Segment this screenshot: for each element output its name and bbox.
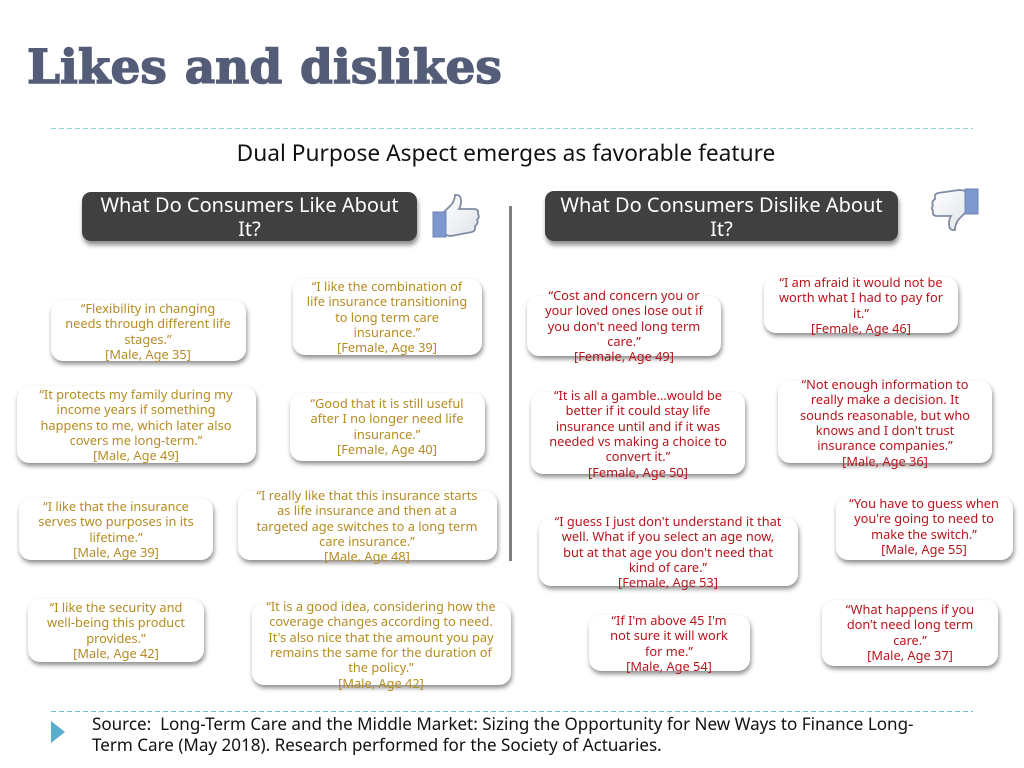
quote: above 45: not sure it will work [610,626,728,644]
quote: understand: [Female, Age 53] [618,573,718,591]
quote: protects: covers me long-term.” [70,431,202,449]
header: dislikes [545,191,898,241]
quote: two purposes: serves two purposes in its [38,512,194,530]
header: likes [82,192,417,241]
quote: gamble: “It is all a gamble…would be [554,386,722,404]
quote card: what happens [822,600,998,666]
quote: what happens [846,600,974,664]
quote: cost: care.” [607,332,641,350]
panel: likes quotes [14,277,516,692]
header: likes: It? [238,215,261,242]
quote: cost [545,286,704,365]
quote: not enough: knows and I don't trust [816,421,954,439]
quote card: good idea [252,603,511,685]
quote: good idea: coverage changes according to need. [269,612,493,630]
quote: not enough [800,375,970,470]
quote: security [47,598,185,662]
subtitle: Dual Purpose Aspect emerges as favorable feature [237,137,775,168]
quote: combination: to long term care [335,308,439,326]
icon: thumbs up [432,194,480,238]
quote: what happens: [Male, Age 37] [867,646,953,664]
quote: two purposes: [Male, Age 39] [73,543,159,561]
quote: security: well-being this product [47,613,185,631]
quote: really like: care insurance.” [319,532,415,550]
quote card: flexibility [51,300,246,361]
quote: not enough: “Not enough information to [802,375,968,393]
quote: above 45: for me.” [645,642,693,660]
quote: good idea: remains the same for the duration of [270,643,492,661]
quote: guess when: “You have to guess when [849,494,999,512]
quote: still useful: after I no longer need life [310,409,464,427]
quote: security: “I like the security and [50,598,182,616]
title: Likes and dislikes [27,40,502,95]
quote card: above 45 [589,615,750,671]
quote: understand: well. What if you select an age now, [562,527,774,545]
quote card: guess when [836,497,1013,560]
quote: good idea: It's also nice that the amount you pay [268,628,494,646]
quote: afraid: “I am afraid it would not be [779,273,943,291]
quote: protects [39,385,233,464]
quote: not enough: insurance companies.” [817,436,953,454]
quote: good idea: the policy.” [348,658,414,676]
quote: protects: [Male, Age 49] [93,446,179,464]
quote: understand: kind of care.” [629,558,707,576]
quote card: still useful [290,393,485,461]
quote card: gamble [531,392,745,474]
quote card: really like [238,491,497,560]
quote: gamble: better if it could stay life [566,401,710,419]
quote: cost: “Cost and concern you or [548,286,700,304]
quote: security: provides.” [86,629,146,647]
quote card: security [28,599,204,662]
quote: not enough: sounds reasonable, but who [800,406,970,424]
divider [509,206,512,561]
quote: combination: life insurance transitioning [307,292,467,310]
quote: cost: [Female, Age 49] [574,347,674,365]
quote: what happens: don’t need long term [847,615,973,633]
quote: two purposes [38,497,194,561]
panel: dislikes quotes [524,273,1018,678]
source note: Term Care (May 2018). Research performed for the Society of Actuaries. [92,733,662,756]
quote: protects: income years if something [57,400,215,418]
quote: afraid [779,273,943,337]
quote: above 45 [610,611,728,675]
quote: good idea: [Male, Age 42] [338,674,424,692]
quote: gamble: convert it.” [606,447,670,465]
quote: guess when: [Male, Age 55] [881,540,967,558]
quote: guess when: make the switch.” [871,525,977,543]
quote card: protects [17,386,256,463]
quote card: cost [527,296,721,356]
quote card: combination [293,279,482,355]
quote: still useful: insurance.” [354,425,420,443]
quote: guess when [849,494,999,558]
quote: what happens: care.” [893,631,927,649]
quote: not enough: [Male, Age 36] [842,452,928,470]
quote: what happens: “What happens if you [846,600,974,618]
quote: flexibility: stages.” [124,330,172,348]
header: dislikes: It? [710,215,733,242]
quote: not enough: really make a decision. It [811,390,959,408]
quote: good idea [266,597,496,692]
quote: above 45: “If I'm above 45 I'm [611,611,727,629]
quote: gamble [549,386,727,481]
quote: flexibility: [Male, Age 35] [105,345,191,363]
quote: still useful: [Female, Age 40] [337,440,437,458]
quote: protects: happens to me, which later also [41,416,231,434]
quote: good idea: “It is a good idea, considering how the [266,597,496,615]
icon: source arrow [51,721,65,743]
quote: afraid: it.” [853,304,869,322]
quote card: not enough [778,381,992,463]
quote: guess when: you're going to need to [854,509,994,527]
quote: combination [307,277,467,356]
quote: really like: targeted age switches to a long term [257,517,477,535]
quote: gamble: needed vs making a choice to [549,432,727,450]
quote: two purposes: “I like that the insurance [43,497,189,515]
quote: cost: your loved ones lose out if [545,301,703,319]
quote: flexibility [65,299,231,363]
quote: protects: “It protects my family during my [39,385,233,403]
quote: two purposes: lifetime.” [89,528,143,546]
quote: still useful [310,394,464,458]
quote: security: [Male, Age 42] [73,644,159,662]
quote: combination: “I like the combination of [312,277,462,295]
quote: understand: but at that age you don't need that [563,543,773,561]
quote: gamble: insurance until and if it was [556,417,720,435]
quote: flexibility: needs through different life [65,314,231,332]
quote: really like: [Male, Age 48] [324,547,410,565]
quote: cost: you don't need long term [548,317,700,335]
quote: really like: as life insurance and then at a [277,501,457,519]
quote: afraid: worth what I had to pay for [779,288,943,306]
quote card: understand [539,518,798,586]
quote: really like: “I really like that this insurance starts [256,486,478,504]
header: dislikes: What Do Consumers Dislike About [560,191,883,218]
quote: understand: “I guess I just don't understand it that [555,512,781,530]
source note [92,712,914,756]
quote: combination: [Female, Age 39] [337,338,437,356]
quote: really like [256,486,478,565]
quote: gamble: [Female, Age 50] [588,463,688,481]
header: likes: What Do Consumers Like About [100,191,399,218]
quote: combination: insurance.” [354,323,420,341]
source note: Source: Long-Term Care and the Middle Market: Sizing the Opportunity for New Ways to Finance Long- [92,712,914,735]
quote: understand [554,512,782,591]
quote: above 45: [Male, Age 54] [626,657,712,675]
quote card: afraid [764,277,958,333]
quote card: two purposes [19,498,213,560]
quote: afraid: [Female, Age 46] [811,319,911,337]
quote: flexibility: “Flexibility in changing [81,299,215,317]
quote: still useful: “Good that it is still useful [310,394,464,412]
icon: thumbs down [931,188,978,231]
